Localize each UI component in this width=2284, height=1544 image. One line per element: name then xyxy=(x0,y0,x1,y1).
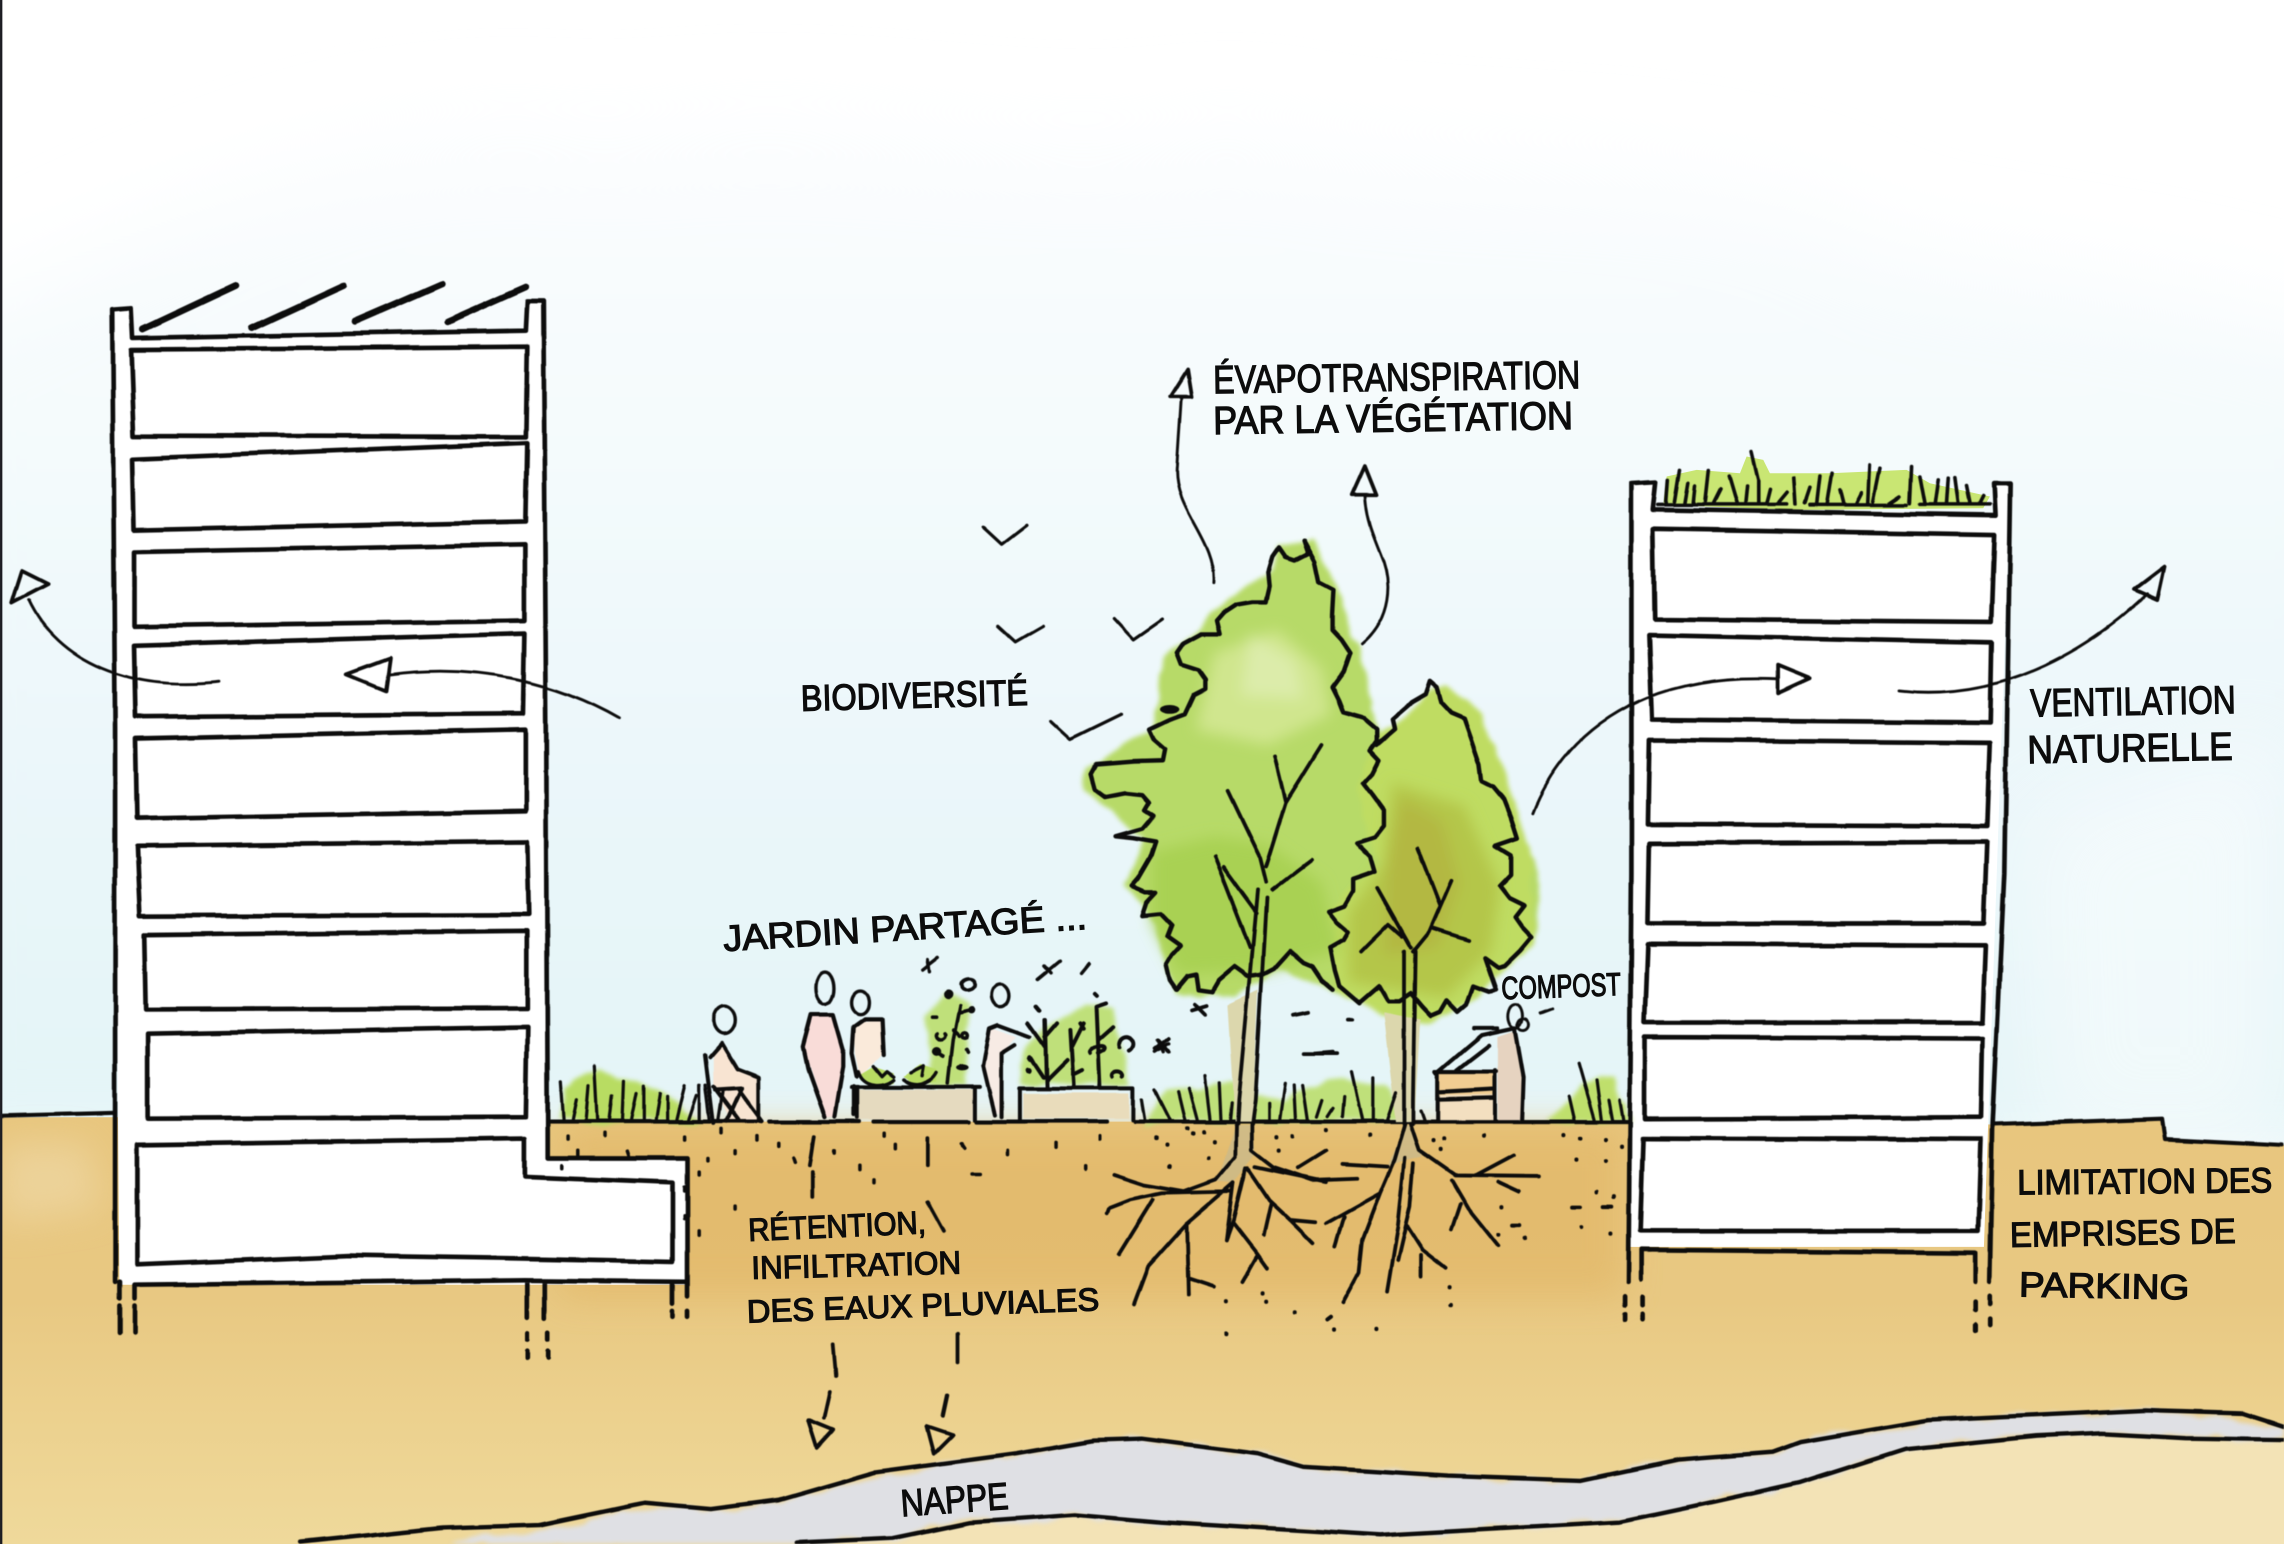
aquifer: layer below water table xyxy=(797,1433,2284,1544)
arrow: evapotranspiration left xyxy=(1170,369,1214,583)
label: nappe: NAPPE xyxy=(899,1476,1010,1525)
small tree: trunk and branches xyxy=(1362,848,1469,1124)
aquifer: water band xyxy=(422,1410,2284,1544)
large tree: trunk and branches xyxy=(1214,745,1321,1124)
green roof wash xyxy=(1663,457,1990,510)
left building: solar panels xyxy=(143,284,526,329)
planter one xyxy=(852,1087,980,1120)
grass strokes left xyxy=(561,1066,722,1122)
tree foliage watercolor xyxy=(1085,540,1542,1024)
root flare fill xyxy=(1217,1125,1423,1183)
falling leaves xyxy=(1155,1004,1352,1053)
soil speckles xyxy=(562,1129,1100,1235)
person gardening xyxy=(983,983,1030,1117)
arrow: evapotranspiration right xyxy=(1352,466,1388,644)
left building: basement xyxy=(137,1139,673,1264)
aquifer outlines xyxy=(300,1410,2284,1543)
arrowhead: infiltration right xyxy=(926,1426,953,1454)
label: ventilation: VENTILATION xyxy=(2030,678,2236,726)
compost bin xyxy=(1435,1028,1524,1120)
right building: floors xyxy=(1640,529,1994,1231)
left building: white mass xyxy=(111,302,688,1285)
left building: outer walls xyxy=(112,302,688,1359)
lettuces xyxy=(858,1065,937,1088)
small tree: crown outline xyxy=(1330,682,1531,1017)
label: retention: RÉTENTION, xyxy=(747,1204,927,1248)
label: parking: PARKING xyxy=(2019,1265,2190,1307)
left building: floors xyxy=(131,347,529,1119)
birds xyxy=(983,526,1162,738)
label: infiltration: INFILTRATION xyxy=(751,1244,961,1286)
tree foliage shading xyxy=(1152,630,1500,997)
left page edge xyxy=(0,0,2,1544)
plant seed heads xyxy=(932,990,1033,1073)
right building: white mass xyxy=(1629,484,2010,1247)
labels xyxy=(722,353,2272,1525)
ground lines xyxy=(1,1113,2281,1145)
person seated xyxy=(705,1006,762,1123)
left building xyxy=(112,284,688,1359)
small tree xyxy=(1330,682,1531,1124)
label: par la vegetation: PAR LA VÉGÉTATION xyxy=(1213,394,1573,443)
label: emprises de: EMPRISES DE xyxy=(2010,1212,2236,1255)
large tree xyxy=(1091,540,1384,1124)
compost figure marks xyxy=(1508,1005,1553,1031)
shared garden xyxy=(705,958,1168,1123)
label: limitation des: LIMITATION DES xyxy=(2017,1161,2272,1202)
garden plants xyxy=(1028,993,1134,1087)
green roof grass xyxy=(1658,452,1990,505)
rain infiltration arrows xyxy=(808,1136,957,1454)
label: evapotranspiration: ÉVAPOTRANSPIRATION xyxy=(1213,353,1581,402)
person bending xyxy=(852,991,883,1115)
sky wash xyxy=(0,128,2284,1165)
arrow: ventilation left building xyxy=(12,571,619,718)
climbing plant xyxy=(932,979,975,1083)
vegetation watercolor: grass and roof xyxy=(562,990,1629,1122)
label: naturelle: NATURELLE xyxy=(2027,725,2233,772)
label: des eaux pluviales: DES EAUX PLUVIALES xyxy=(746,1281,1100,1330)
small bird xyxy=(1159,705,1180,714)
label: biodiversite: BIODIVERSITÉ xyxy=(800,672,1029,719)
label: compost: COMPOST xyxy=(1501,966,1621,1006)
tree trunks fill xyxy=(1228,990,1420,1122)
roots, grass and soil detail xyxy=(1107,1063,1623,1334)
right building xyxy=(1626,482,2010,1331)
ground: soil mass xyxy=(0,1117,2284,1544)
soil speckles near trees xyxy=(1157,1128,1621,1334)
large tree: crown outline xyxy=(1091,540,1384,992)
grass tufts near trees xyxy=(1142,1063,1623,1122)
label: jardin partage: JARDIN PARTAGÉ ... xyxy=(722,896,1088,959)
sky highlight right xyxy=(2025,728,2284,1151)
arrowhead: infiltration left xyxy=(808,1420,833,1448)
person standing xyxy=(803,971,845,1117)
flying insects xyxy=(923,958,1168,1052)
planter two xyxy=(1019,1088,1134,1120)
arrow: ventilation right building xyxy=(1532,567,2165,813)
right building: outer walls xyxy=(1626,482,2010,1331)
tree roots xyxy=(1107,1123,1539,1305)
